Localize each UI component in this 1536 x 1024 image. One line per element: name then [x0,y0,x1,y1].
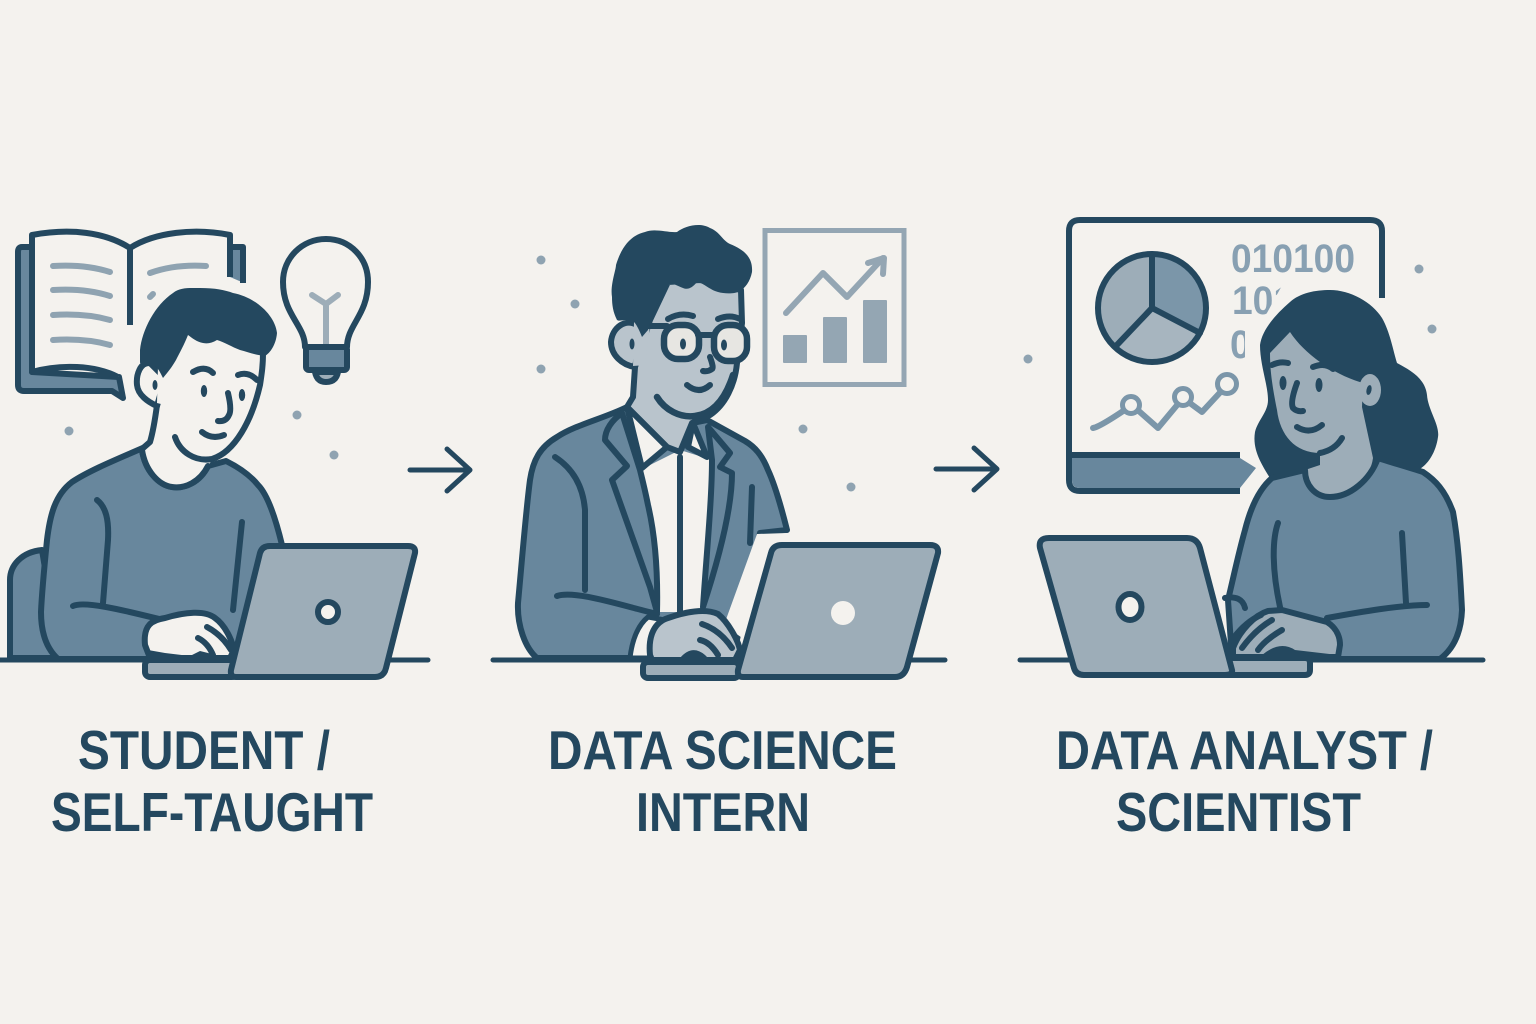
stage 1: student illustration [0,232,428,677]
binary digits: 101 [1232,279,1294,323]
icon: light bulb [283,239,368,382]
binary digits: 010100 [1231,237,1355,281]
label: data analyst / scientist [1056,719,1433,843]
analyst sleeve lines [1225,523,1427,618]
laptop base [145,660,237,677]
laptop base [1228,658,1310,675]
intern jacket lines [555,457,752,614]
label: student / self-taught [51,719,373,843]
analyst sweater [1228,458,1462,659]
halo behind student head [137,288,277,460]
line chart [1093,374,1236,428]
label: student / self-taught: SELF-TAUGHT [51,781,373,843]
stage 3: analyst illustration [1020,220,1483,675]
label: data analyst / scientist: DATA ANALYST / [1056,719,1433,781]
binary digits [1232,244,1354,358]
label: data science intern [548,719,897,843]
analyst face [1270,332,1381,497]
student sleeve lines [73,500,242,620]
halo behind analyst hair [1260,290,1387,480]
intern shirt [640,450,712,612]
intern neck and face [611,225,752,617]
desk line [493,658,945,662]
icon: growth chart [765,230,904,384]
board footer strip [1072,458,1256,488]
student hair [140,288,277,378]
laptop screen [738,545,938,677]
analyst hair [1254,290,1438,478]
arrow: intern to analyst [936,448,997,490]
binary digits: 0 [1230,323,1251,367]
label: data science intern: INTERN [636,781,810,843]
intern jacket [518,407,787,658]
decorative dots: intern [536,256,856,492]
student hand [145,613,234,663]
intern hair [612,225,752,337]
laptop screen [231,546,415,677]
label: student / self-taught: STUDENT / [78,719,330,781]
desk line [0,658,428,662]
infographic canvas [0,217,1486,832]
student face [137,288,277,487]
laptop screen [1040,538,1232,675]
analyst hand [1232,610,1340,662]
decorative dots: student [64,410,338,460]
stage 2: intern illustration [493,225,945,678]
chair [10,550,60,658]
label: data analyst / scientist: SCIENTIST [1116,781,1361,843]
label: data science intern: DATA SCIENCE [548,719,897,781]
decorative dots: analyst [1024,264,1436,364]
intern collar [627,407,707,468]
presentation board [1069,220,1382,491]
intern hand and cuff [630,611,740,662]
desk line [1020,658,1483,662]
laptop halo [724,533,790,640]
arrow: student to intern [410,449,470,491]
pie chart [1098,254,1206,362]
student body: sweater [41,447,282,659]
laptop base [643,662,739,678]
icon: open book [18,232,244,398]
intern glasses [647,325,747,361]
intern lapels [605,413,732,612]
